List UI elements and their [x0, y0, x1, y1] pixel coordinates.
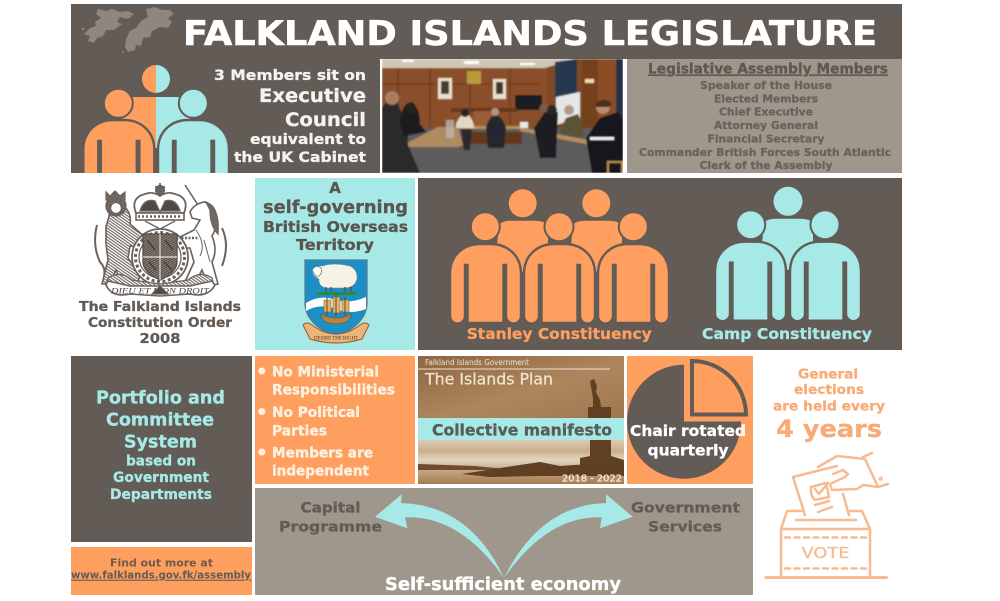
text: Chair rotated quarterly: quarterly — [648, 442, 729, 460]
lion — [95, 191, 146, 286]
text: Constitution Order caption: 2008 — [140, 331, 180, 347]
unicorn — [176, 185, 226, 286]
list of members: Financial Secretary — [708, 133, 824, 146]
panel: The Islands Plan — [418, 356, 624, 484]
crown — [134, 193, 186, 213]
icon: map of the Falkland Islands — [82, 7, 174, 53]
text: self-governing British Overseas Territory: Territory — [296, 236, 374, 254]
heading: Legislative Assembly Members: Legislative Assembly Members — [648, 62, 888, 78]
panel: chair rotated quarterly — [627, 356, 753, 484]
photo: assembly meeting room — [382, 59, 623, 173]
text: self-governing British Overseas Territory: self-governing — [263, 197, 408, 218]
bullet list: Parties — [272, 424, 327, 440]
panel: Legislative Assembly Members — [627, 59, 902, 173]
label: Stanley Constituency: Stanley Constituency — [467, 325, 652, 343]
list of members: Clerk of the Assembly — [700, 159, 832, 172]
text: self-governing British Overseas Territory: British Overseas — [263, 218, 408, 236]
link: assembly website: www.falklands.gov.fk/assembly — [71, 569, 251, 582]
label: VOTE: VOTE — [802, 544, 850, 562]
arrow: to Government Services — [504, 494, 633, 578]
text: Chair rotated quarterly — [630, 422, 746, 460]
panel: Portfolio and Committee System — [71, 356, 252, 542]
icon: royal coat of arms: DIEU ET MON DROIT — [110, 286, 210, 296]
text: Constitution Order caption: The Falkland Islands — [79, 299, 241, 315]
text: Capital Programme: Programme — [279, 520, 382, 536]
text: Government Services: Services — [648, 520, 722, 536]
panel: member principles — [255, 356, 415, 484]
text: Portfolio and Committee System: Portfolio and — [96, 388, 225, 408]
bullet list: independent — [272, 464, 369, 480]
text: Executive Council membership: the UK Cabinet — [234, 150, 366, 166]
arrow: to Capital Programme — [375, 494, 504, 578]
chart: pie with quarter segment — [627, 361, 746, 479]
text: Executive Council membership — [214, 68, 366, 166]
icon: Camp group of three people — [715, 187, 861, 321]
panel: Executive Council — [71, 59, 380, 173]
panel: title banner — [71, 4, 902, 59]
panel: constituencies — [418, 178, 902, 350]
panel: self-governing territory — [255, 178, 415, 350]
text: Portfolio and Committee System: based on — [126, 454, 196, 470]
title: FALKLAND ISLANDS LEGISLATURE — [183, 14, 877, 54]
bullet list: No Political — [272, 405, 360, 421]
icon: hand placing ballot in vote box — [766, 453, 888, 578]
bullet list: Members are — [272, 446, 373, 462]
list of members: Commander British Forces South Atlantic — [639, 146, 891, 159]
text: Chair rotated quarterly: Chair rotated — [630, 422, 746, 440]
text: general elections every 4 years: are held every — [773, 398, 885, 414]
list of members: Elected Members — [714, 92, 818, 105]
icon: Falkland Islands coat of arms — [303, 260, 369, 343]
list of members — [639, 79, 891, 172]
bullet list: No Ministerial — [272, 364, 379, 380]
compartment — [106, 274, 214, 289]
label: Self-sufficient economy: Self-sufficient economy — [385, 575, 622, 595]
text: Constitution Order caption — [79, 299, 241, 347]
text: Constitution Order caption: Constitution Order — [88, 315, 232, 331]
text: self-governing British Overseas Territory: A — [329, 179, 341, 197]
text: Capital Programme — [279, 500, 382, 536]
icon: Stanley group of five people — [450, 189, 669, 324]
text: Find out more: Find out more at — [110, 556, 213, 569]
list of members: Speaker of the House — [700, 79, 832, 92]
text: Government Services: Government — [631, 500, 740, 516]
text: Portfolio and Committee System: Departments — [110, 487, 212, 503]
text: Portfolio and Committee System: System — [124, 432, 197, 452]
panel: self-sufficient economy — [255, 488, 753, 595]
text: general elections every 4 years: elections — [794, 382, 864, 398]
label: Camp Constituency: Camp Constituency — [702, 325, 872, 343]
text: Portfolio and Committee System: Committee — [106, 410, 214, 430]
text: Executive Council membership: equivalent to — [250, 132, 366, 148]
text: Executive Council membership: Council — [285, 109, 366, 131]
icon: Falkland Islands coat of arms: DESIRE THE RIGHT — [314, 336, 358, 342]
text: general elections every 4 years: 4 years — [776, 415, 882, 443]
text: plan years: 2018 - 2022 — [562, 474, 622, 484]
text: Capital Programme: Capital — [300, 500, 360, 516]
text: Falkland Islands Government: Falkland Islands Government — [425, 358, 529, 367]
motto ribbon — [106, 281, 215, 296]
text: Executive Council membership: Executive — [259, 85, 366, 107]
list of members: Chief Executive — [719, 106, 813, 119]
text: general elections every 4 years — [773, 367, 885, 443]
text: general elections every 4 years: General — [798, 367, 858, 383]
text: Portfolio and Committee System — [96, 388, 225, 503]
panel: Constitution Order — [79, 183, 241, 347]
text: Executive Council membership: 3 Members sit on — [214, 68, 366, 84]
text: self-governing British Overseas Territory — [263, 179, 408, 254]
image: monument and harbour silhouette — [418, 379, 624, 477]
bullet list — [259, 364, 395, 480]
text: Government Services — [631, 500, 740, 536]
list of members: Attorney General — [714, 119, 818, 132]
banner: Collective manifesto: Collective manifesto — [432, 420, 612, 440]
panel: find out more — [71, 547, 252, 595]
garter and shield — [132, 229, 188, 285]
icon: royal coat of arms — [95, 183, 226, 296]
text: Portfolio and Committee System: Government — [113, 470, 209, 486]
icon: three people — [84, 65, 228, 173]
panel: general elections — [766, 367, 888, 578]
text: The Islands Plan: The Islands Plan — [424, 370, 553, 388]
bullet list: Responsibilities — [272, 382, 395, 398]
